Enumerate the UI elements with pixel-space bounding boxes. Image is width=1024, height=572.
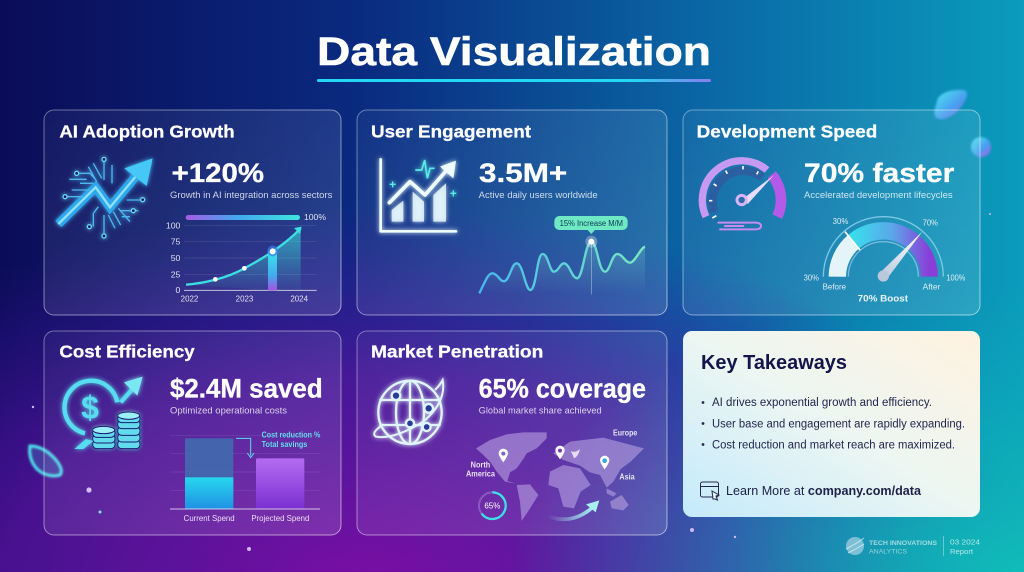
- callout: [554, 216, 628, 234]
- description: Growth in AI integration across sectors: [170, 190, 333, 200]
- stat: $2.4M saved: [170, 373, 323, 403]
- decorative crystal top right: [934, 90, 967, 119]
- bullet list: AI drives exponential growth and efficiency.: [712, 397, 932, 409]
- footer: [846, 536, 980, 556]
- bar chart: [170, 431, 320, 523]
- description: Accelerated development lifecycles: [804, 190, 953, 200]
- icon: globe: [374, 380, 443, 444]
- line chart: 2022: [181, 294, 198, 304]
- line chart: 100%: [304, 212, 326, 222]
- heading: Market Penetration: [371, 342, 543, 362]
- stat: 70% faster: [804, 158, 954, 188]
- description: Optimized operational costs: [170, 405, 287, 415]
- footer: ANALYTICS: [869, 548, 907, 556]
- gauge chart: 100%: [946, 273, 966, 283]
- bullet list: [702, 397, 965, 452]
- line chart: 50: [171, 253, 181, 263]
- icon: browser cursor: [700, 482, 719, 500]
- footer: TECH INNOVATIONS: [869, 540, 938, 547]
- bar chart: Projected Spend: [251, 513, 309, 523]
- heading: User Engagement: [371, 121, 531, 141]
- line chart: 75: [171, 237, 181, 247]
- progress ring: 65%: [484, 502, 500, 511]
- panel: AI Adoption Growth: [44, 110, 341, 315]
- bar chart: Total savings: [262, 440, 308, 449]
- gauge chart: 30%: [804, 273, 819, 283]
- bar chart: Current Spend: [184, 513, 235, 523]
- line chart: 25: [171, 269, 181, 279]
- world map: North: [471, 461, 490, 470]
- icon: dollar and coins: [64, 377, 143, 449]
- bullet list: User base and engagement are rapidly expanding.: [712, 418, 965, 430]
- gauge chart: [804, 216, 966, 303]
- line chart: 0: [176, 285, 181, 295]
- stat: 65% coverage: [479, 373, 646, 403]
- line chart: 2023: [236, 294, 253, 304]
- description: Active daily users worldwide: [479, 190, 598, 200]
- call to action: Learn More at company.com/data: [726, 483, 922, 498]
- panel: Development Speed: [683, 110, 980, 315]
- progress ring: [479, 492, 506, 519]
- line chart: 2024: [290, 294, 308, 304]
- panel: Key Takeaways: [683, 331, 980, 517]
- decorative particles: [32, 213, 991, 551]
- title: Data Visualization: [317, 30, 711, 74]
- description: Global market share achieved: [479, 405, 602, 415]
- stat: 3.5M+: [479, 158, 567, 188]
- world map: Europe: [613, 429, 638, 438]
- gauge chart: 70%: [923, 218, 938, 228]
- line chart: 100: [166, 220, 181, 230]
- heading: Cost Efficiency: [59, 342, 195, 362]
- footer: Report: [950, 547, 973, 556]
- bullet list: Cost reduction and market reach are maximized.: [712, 440, 955, 452]
- icon: rising bar chart: [381, 159, 456, 231]
- panel: Market Penetration: [357, 331, 667, 535]
- panel: User Engagement: [357, 110, 667, 315]
- panel: Cost Efficiency: [44, 331, 341, 535]
- world map: Asia: [619, 473, 635, 482]
- icon: company logo: [846, 537, 864, 555]
- stat: +120%: [172, 158, 264, 188]
- footer: 03 2024: [950, 538, 980, 546]
- gauge chart: Before: [823, 282, 846, 292]
- gauge chart: 30%: [833, 216, 849, 226]
- decorative crystal left: [30, 446, 61, 476]
- bar chart: Cost reduction %: [262, 431, 320, 440]
- world map: America: [466, 469, 496, 478]
- callout: 15% Increase M/M: [560, 219, 623, 228]
- icon: dollar and coins: $: [81, 389, 99, 425]
- heading: AI Adoption Growth: [59, 121, 235, 141]
- area chart: [479, 216, 645, 294]
- title underline: [317, 79, 711, 82]
- gauge chart: 70% Boost: [858, 293, 908, 303]
- icon: circuit growth arrow: [58, 157, 153, 238]
- heading: Key Takeaways: [701, 352, 847, 374]
- icon: speedometer: [702, 161, 781, 229]
- heading: Development Speed: [697, 121, 877, 141]
- decorative orb: [971, 137, 991, 157]
- gauge chart: After: [923, 282, 940, 292]
- line chart: [166, 212, 326, 304]
- world map: [466, 429, 644, 521]
